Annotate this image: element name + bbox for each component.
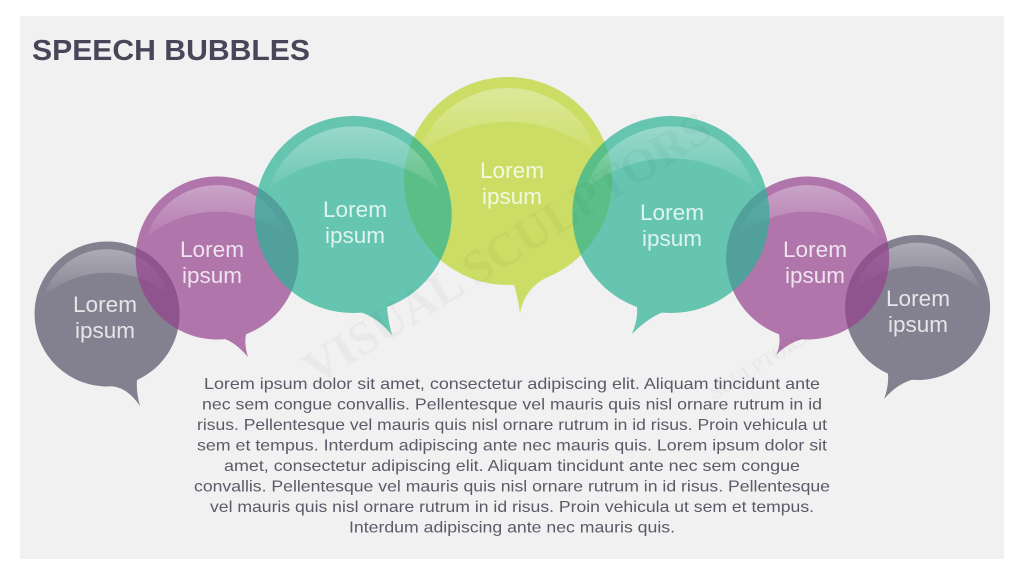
title: SPEECH BUBBLES bbox=[32, 35, 310, 67]
label: grey left bbox=[73, 292, 137, 343]
body paragraph: convallis. Pellentesque vel mauris quis nisl ornare rutrum in id risus. Pellentesque bbox=[194, 478, 830, 496]
label: grey left: Lorem bbox=[73, 292, 137, 317]
label: green centre: ipsum bbox=[482, 184, 542, 209]
body paragraph: Lorem ipsum dolor sit amet, consectetur adipiscing elit. Aliquam tincidunt ante bbox=[204, 376, 820, 393]
label: green centre bbox=[480, 158, 544, 209]
label: purple left: Lorem bbox=[180, 237, 244, 262]
label: teal left: ipsum bbox=[325, 223, 385, 248]
label: purple right bbox=[783, 237, 847, 288]
bubble: purple right bbox=[726, 176, 889, 355]
label: teal right: Lorem bbox=[640, 200, 704, 225]
label: grey right: Lorem bbox=[886, 286, 950, 311]
bubble: teal left bbox=[255, 116, 452, 335]
bubble: grey right bbox=[845, 235, 990, 399]
body paragraph: vel mauris quis nisl ornare rutrum in id risus. Proin vehicula ut sem et tempus. bbox=[210, 499, 814, 516]
label: teal left bbox=[323, 197, 387, 248]
label: purple left bbox=[180, 237, 244, 288]
label: teal right bbox=[640, 200, 704, 251]
label: grey right: ipsum bbox=[888, 312, 948, 337]
label: grey left: ipsum bbox=[75, 318, 135, 343]
label: purple left: ipsum bbox=[182, 263, 242, 288]
bubble: grey left bbox=[35, 241, 180, 406]
body paragraph: amet, consectetur adipiscing elit. Aliquam tincidunt ante nec sem congue bbox=[224, 458, 800, 475]
body paragraph: nec sem congue convallis. Pellentesque vel mauris quis nisl ornare rutrum in id bbox=[202, 396, 822, 414]
body paragraph bbox=[194, 376, 830, 536]
label: purple right: Lorem bbox=[783, 237, 847, 262]
body paragraph: sem et tempus. Interdum adipiscing ante nec mauris quis. Lorem ipsum dolor sit bbox=[197, 438, 828, 454]
label: green centre: Lorem bbox=[480, 158, 544, 183]
watermark: large diagonal: VISUAL SCULPTORS bbox=[294, 101, 720, 395]
bubble: teal right bbox=[572, 116, 769, 334]
label: purple right: ipsum bbox=[785, 263, 845, 288]
label: grey right bbox=[886, 286, 950, 337]
body paragraph: risus. Pellentesque vel mauris quis nisl ornare rutrum in id risus. Proin vehicula ut bbox=[197, 417, 828, 434]
bubble: purple left bbox=[136, 176, 299, 357]
watermark: small diagonal: SCULPTORS bbox=[706, 327, 811, 404]
body paragraph: Interdum adipiscing ante nec mauris quis. bbox=[349, 520, 675, 536]
label: teal left: Lorem bbox=[323, 197, 387, 222]
label: teal right: ipsum bbox=[642, 226, 702, 251]
bubble: green centre bbox=[404, 77, 612, 313]
